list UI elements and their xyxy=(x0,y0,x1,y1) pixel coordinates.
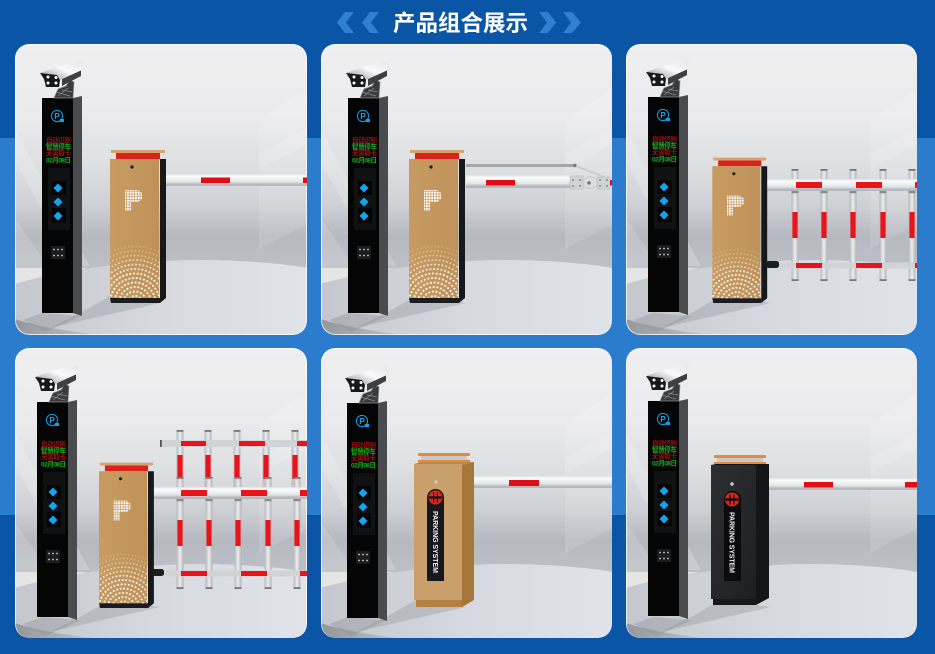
ticket kiosk: 02月08日 xyxy=(41,460,66,468)
panel: kiosk with gold barrier and fence arm xyxy=(626,44,917,335)
panel: kiosk with tan cabinet barrier xyxy=(321,348,613,639)
ticket kiosk: 02月08日 xyxy=(652,460,677,468)
ticket kiosk xyxy=(35,365,78,620)
label plate xyxy=(427,489,444,581)
gold barrier body xyxy=(99,462,154,608)
ticket kiosk: 02月08日 xyxy=(652,156,677,164)
straight arm xyxy=(166,174,308,186)
ticket kiosk: 无需取卡 xyxy=(46,148,71,158)
ticket kiosk: 02月08日 xyxy=(352,156,377,164)
gold barrier body xyxy=(712,158,768,303)
label plate: PARKING SYSTEM xyxy=(728,512,734,573)
lower fence section xyxy=(151,477,314,589)
panel: kiosk with gold barrier and folding arm xyxy=(321,44,613,360)
ticket kiosk: 无需取卡 xyxy=(652,452,677,460)
ticket kiosk xyxy=(345,366,388,621)
panel: kiosk with black cabinet barrier xyxy=(626,348,918,639)
folding arm xyxy=(466,164,613,189)
fence arm xyxy=(766,169,929,281)
ticket kiosk: P xyxy=(660,414,666,424)
gold barrier body xyxy=(110,150,166,303)
title: 产品组合展示 xyxy=(393,11,528,36)
ticket kiosk: 自动识别 xyxy=(652,438,677,448)
ticket kiosk xyxy=(646,364,689,619)
ticket kiosk: 智慧停车 xyxy=(652,141,677,150)
ticket kiosk xyxy=(40,61,83,316)
black barrier cabinet xyxy=(711,455,769,605)
panel: kiosk with gold barrier and straight arm xyxy=(15,44,308,360)
ticket kiosk: 自动识别 xyxy=(351,440,376,450)
ticket kiosk: P xyxy=(49,415,55,425)
icon: right chevrons xyxy=(539,12,581,33)
ticket kiosk: 02月08日 xyxy=(351,462,376,470)
ticket kiosk: 智慧停车 xyxy=(352,142,377,151)
upper fence section xyxy=(160,430,308,490)
ticket kiosk: 智慧停车 xyxy=(351,447,376,456)
gold barrier body xyxy=(409,150,465,303)
icon: left chevrons xyxy=(337,12,379,33)
ticket kiosk: 无需取卡 xyxy=(652,148,677,156)
ticket kiosk: 02月08日 xyxy=(46,156,71,164)
straight arm xyxy=(769,478,918,490)
ticket kiosk: P xyxy=(54,111,60,121)
straight arm xyxy=(473,476,613,488)
label plate: PARKING SYSTEM xyxy=(431,511,438,573)
ticket kiosk: P xyxy=(360,111,366,121)
ticket kiosk xyxy=(646,60,689,315)
ticket kiosk: 无需取卡 xyxy=(352,148,377,158)
ticket kiosk: P xyxy=(660,110,666,120)
ticket kiosk: P xyxy=(359,416,365,426)
panel: kiosk with gold barrier and double fence arm xyxy=(15,348,314,654)
title heading with chevrons xyxy=(337,11,581,36)
ticket kiosk: 自动识别 xyxy=(352,136,377,144)
ticket kiosk: 自动识别 xyxy=(41,440,66,448)
tan barrier cabinet xyxy=(414,453,474,607)
label plate xyxy=(724,491,741,581)
ticket kiosk: 无需取卡 xyxy=(41,452,66,462)
ticket kiosk: 智慧停车 xyxy=(46,142,71,151)
ticket kiosk: 智慧停车 xyxy=(41,446,66,455)
ticket kiosk: 无需取卡 xyxy=(351,454,376,462)
ticket kiosk: 自动识别 xyxy=(46,136,71,144)
ticket kiosk: 自动识别 xyxy=(652,134,677,144)
ticket kiosk: 智慧停车 xyxy=(652,445,677,454)
ticket kiosk xyxy=(346,61,389,316)
